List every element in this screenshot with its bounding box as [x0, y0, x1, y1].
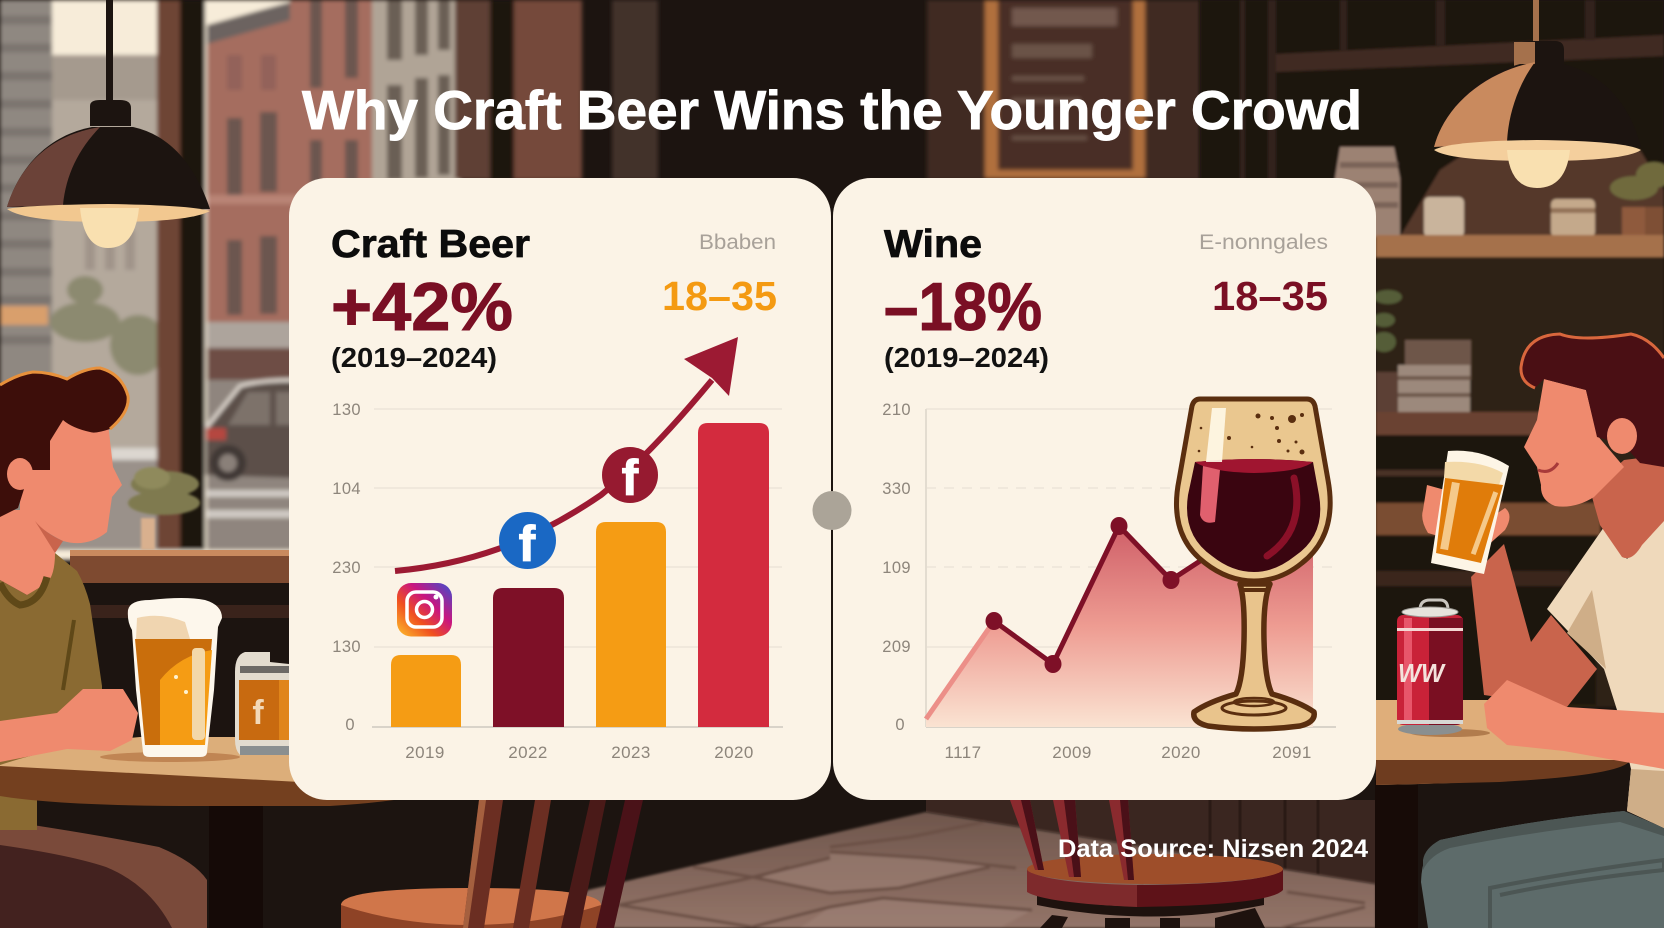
icon: wine glass [1176, 399, 1330, 729]
bar 2023 [596, 522, 666, 727]
lamp right [1434, 0, 1641, 188]
person: beer glass [1431, 451, 1509, 574]
title: Why Craft Beer Wins the Younger Crowd [302, 79, 1362, 141]
panel: craft beer [289, 178, 831, 800]
left chair [341, 800, 643, 928]
bar 2019 [391, 655, 461, 727]
y axis labels: 0 [345, 716, 355, 734]
person: head [20, 420, 122, 543]
left table [0, 737, 460, 806]
right table [1376, 700, 1664, 785]
glass bowl [1176, 399, 1330, 581]
person: drink can [1397, 600, 1463, 735]
left person [0, 368, 207, 928]
background: wall and floor below [560, 800, 1376, 928]
bar chart [332, 401, 783, 762]
glass highlights [1200, 408, 1297, 556]
background: shelving wall [1200, 0, 1664, 707]
y axis labels: 130 [332, 401, 361, 419]
person: shirt [1547, 518, 1664, 828]
x axis labels: 2020 [714, 743, 754, 762]
left can: f [252, 694, 264, 732]
area fill [926, 526, 1313, 727]
x axis labels: 2020 [1161, 743, 1201, 762]
icon: instagram [397, 583, 452, 636]
person: hair [0, 368, 128, 517]
y axis labels: 210 [882, 401, 911, 419]
person: upper arm [1471, 544, 1597, 707]
age range: 18–35 [662, 273, 777, 319]
person: drink can: WW [1398, 658, 1446, 688]
background: chalkboard [927, 0, 1200, 180]
y axis labels: 109 [882, 559, 911, 577]
arrow: growth trend [395, 337, 738, 571]
heading: craft beer: Craft Beer [331, 223, 530, 266]
y axis labels: 209 [882, 638, 911, 656]
left arm over table [0, 689, 138, 762]
x axis labels: 2019 [405, 743, 445, 762]
bar 2022 [493, 588, 564, 727]
y axis labels: 230 [332, 559, 361, 577]
person: hand behind glass [1422, 485, 1510, 548]
x axis labels [945, 743, 1312, 762]
y axis labels [882, 401, 911, 734]
background: street through window [0, 0, 658, 560]
y axis labels [332, 401, 361, 734]
heading: wine: Wine [884, 223, 982, 266]
segment label: Bbaben [699, 231, 776, 254]
foam bubbles [1198, 413, 1304, 454]
wine [1187, 459, 1320, 572]
stat: plus 42 percent: +42% [331, 269, 513, 345]
person: hair [1521, 334, 1664, 467]
left beer glass [128, 598, 222, 757]
period label: (2019–2024) [331, 342, 497, 373]
left table leg [209, 800, 263, 928]
source note: Data Source: Nizsen 2024 [1058, 835, 1368, 863]
age range: 18–35 [1212, 273, 1328, 319]
period label: (2019–2024) [884, 342, 1049, 373]
left can [235, 652, 289, 755]
lamp left [7, 0, 210, 248]
person: pants [1421, 811, 1664, 928]
y axis labels: 104 [332, 480, 361, 498]
stat: minus 18 percent: –18% [884, 269, 1042, 345]
window sill [70, 550, 300, 618]
y axis labels: 330 [882, 480, 911, 498]
bar 2020 [698, 423, 769, 727]
glass stem and foot [1194, 584, 1314, 729]
icon: facebook red: f [622, 450, 639, 506]
person: neck [0, 510, 55, 595]
person: face [1524, 379, 1624, 507]
area chart [882, 401, 1336, 762]
right table leg [1375, 780, 1418, 928]
y axis labels: 130 [332, 638, 361, 656]
x axis labels: 2022 [508, 743, 548, 762]
divider handle [812, 491, 852, 530]
line series [926, 517, 1220, 719]
person: shirt [0, 553, 102, 830]
y axis labels: 0 [895, 716, 905, 734]
x axis labels: 2009 [1052, 743, 1092, 762]
person: lower arm [1484, 680, 1664, 769]
plant in window [128, 467, 200, 550]
person: neck [1590, 455, 1664, 558]
x axis labels [405, 743, 754, 762]
right person [1397, 334, 1664, 928]
icon: facebook red [602, 447, 658, 506]
person: pants and seat [0, 820, 207, 928]
icon: facebook blue [499, 512, 556, 572]
right chair [1010, 800, 1283, 928]
x axis labels: 2091 [1272, 743, 1312, 762]
x axis labels: 1117 [945, 743, 981, 762]
icon: facebook blue: f [519, 516, 536, 572]
segment label: E-nonngales [1199, 231, 1328, 254]
x axis labels: 2023 [611, 743, 651, 762]
panel: wine [833, 178, 1376, 800]
